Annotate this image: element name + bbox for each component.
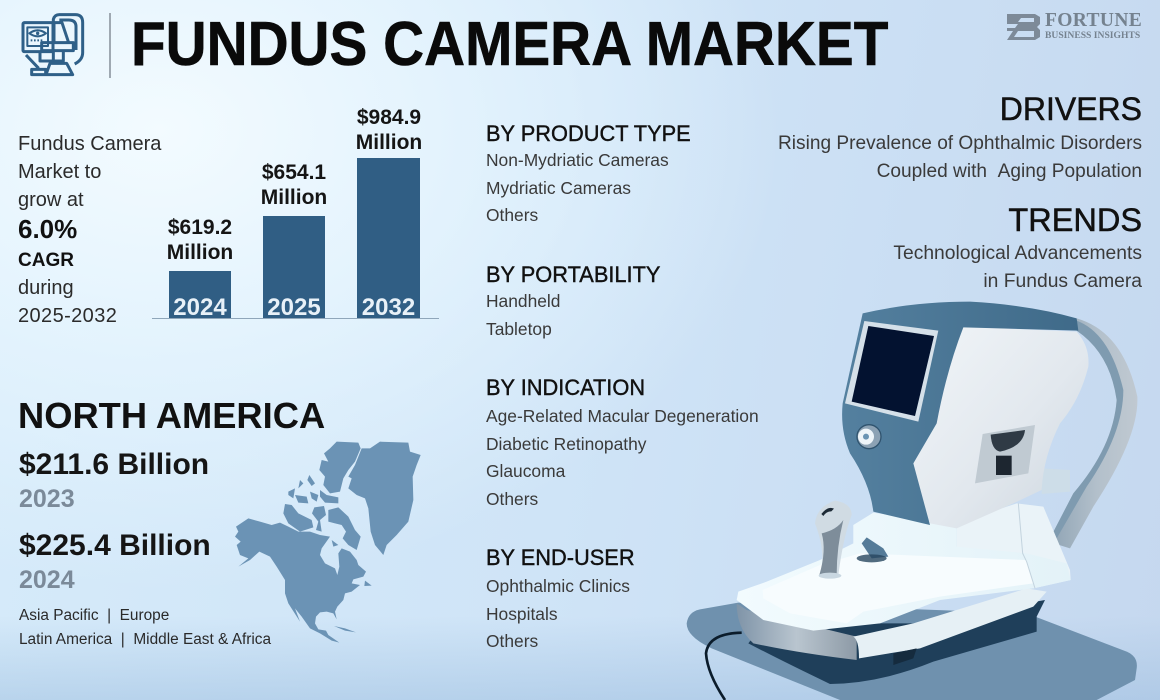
segment: by product type bbox=[486, 121, 691, 225]
list: Mydriatic Cameras bbox=[486, 178, 631, 198]
heading: BY END-USER bbox=[486, 545, 635, 570]
logo: Fortune Business Insights bbox=[1007, 10, 1142, 41]
drivers text bbox=[778, 133, 1142, 182]
list: Others bbox=[486, 631, 538, 651]
CAGR text block: grow at bbox=[18, 189, 84, 211]
list: Tabletop bbox=[486, 319, 552, 339]
arm inner band bbox=[1048, 321, 1123, 542]
value 2024: $619.2 bbox=[168, 216, 232, 239]
list bbox=[486, 150, 669, 225]
heading: BY PRODUCT TYPE bbox=[486, 121, 691, 146]
value 2024: Million bbox=[167, 241, 233, 264]
CAGR text block: CAGR bbox=[18, 250, 74, 271]
list: Diabetic Retinopathy bbox=[486, 434, 646, 454]
other regions: Latin America | Middle East & Africa bbox=[19, 631, 271, 648]
knob bbox=[862, 537, 888, 558]
list: Age-Related Macular Degeneration bbox=[486, 406, 759, 426]
map: North America bbox=[235, 442, 421, 642]
other regions bbox=[19, 607, 272, 648]
heading: BY PORTABILITY bbox=[486, 262, 660, 287]
segment: by portability bbox=[486, 262, 660, 339]
segment: by indication bbox=[486, 375, 759, 509]
bar 2032 bbox=[357, 158, 420, 318]
joystick bbox=[815, 501, 852, 575]
heading: BY INDICATION bbox=[486, 375, 645, 400]
body front and top bbox=[842, 302, 1078, 525]
list: Ophthalmic Clinics bbox=[486, 576, 630, 596]
list: Handheld bbox=[486, 291, 560, 311]
silver band bbox=[737, 603, 857, 660]
bar 2024: 2024 bbox=[173, 294, 227, 321]
trends text bbox=[893, 243, 1142, 292]
other regions: Asia Pacific | Europe bbox=[19, 607, 169, 624]
drivers text: Coupled with Aging Population bbox=[877, 161, 1142, 182]
value 2025 bbox=[261, 161, 327, 209]
drivers text: Rising Prevalence of Ophthalmic Disorders bbox=[778, 133, 1142, 154]
cable bbox=[706, 633, 742, 700]
list bbox=[486, 291, 560, 339]
list bbox=[486, 406, 759, 509]
CAGR text block: Market to bbox=[18, 161, 101, 183]
card panel bbox=[975, 425, 1035, 483]
list: Hospitals bbox=[486, 604, 558, 624]
value 2024 bbox=[167, 216, 233, 264]
front lip bbox=[853, 588, 1047, 658]
bar 2025: 2025 bbox=[267, 294, 321, 321]
arm bbox=[1048, 318, 1137, 548]
region value 2024: $225.4 Billion bbox=[19, 529, 211, 562]
list: Others bbox=[486, 205, 538, 225]
bar 2025 bbox=[263, 216, 325, 318]
value 2032: $984.9 bbox=[357, 106, 421, 129]
logo: Fortune Business Insights: BUSINESS INSIGHTS bbox=[1045, 30, 1140, 41]
region heading: NORTH AMERICA bbox=[18, 395, 325, 436]
base underside bbox=[748, 600, 1045, 684]
value 2032 bbox=[356, 106, 422, 154]
CAGR text block: during bbox=[18, 277, 74, 299]
trends text: in Fundus Camera bbox=[983, 271, 1142, 292]
region value 2023: $211.6 Billion bbox=[19, 448, 209, 481]
trends text: Technological Advancements bbox=[893, 243, 1142, 264]
column bbox=[957, 503, 1071, 588]
list: Non-Mydriatic Cameras bbox=[486, 150, 669, 170]
bar 2032: 2032 bbox=[362, 294, 415, 321]
column seam bbox=[1018, 503, 1035, 588]
list: Glaucoma bbox=[486, 461, 565, 481]
screen bbox=[852, 326, 934, 416]
year 2023: 2023 bbox=[19, 485, 75, 513]
segment: by end-user bbox=[486, 545, 635, 651]
title: FUNDUS CAMERA MARKET bbox=[131, 10, 888, 79]
list: Others bbox=[486, 489, 538, 509]
dial bbox=[857, 425, 881, 449]
base notch bbox=[893, 648, 917, 665]
value 2032: Million bbox=[356, 131, 422, 154]
icon: fundus camera bbox=[22, 13, 84, 76]
bar 2024 bbox=[169, 271, 231, 318]
trends heading: TRENDS bbox=[1008, 202, 1142, 238]
bar chart bbox=[152, 106, 439, 321]
CAGR text block: Fundus Camera bbox=[18, 133, 161, 155]
divider bbox=[109, 13, 110, 78]
CAGR text block: 2025-2032 bbox=[18, 305, 117, 327]
screen frame bbox=[845, 321, 938, 422]
CAGR text block bbox=[18, 133, 162, 327]
logo: Fortune Business Insights: FORTUNE bbox=[1045, 10, 1142, 31]
base inner surface bbox=[763, 553, 1033, 623]
photo: fundus camera device bbox=[686, 302, 1138, 700]
year 2024: 2024 bbox=[19, 566, 75, 594]
rear block bbox=[1042, 468, 1070, 494]
axis bbox=[152, 318, 439, 319]
CAGR text block: 6.0% bbox=[18, 214, 77, 244]
value 2025: $654.1 bbox=[262, 161, 326, 184]
base top bbox=[737, 513, 1071, 631]
drivers heading: DRIVERS bbox=[1000, 91, 1142, 127]
list bbox=[486, 576, 630, 651]
body side bbox=[913, 327, 1089, 528]
table bbox=[687, 603, 1137, 700]
value 2025: Million bbox=[261, 186, 327, 209]
